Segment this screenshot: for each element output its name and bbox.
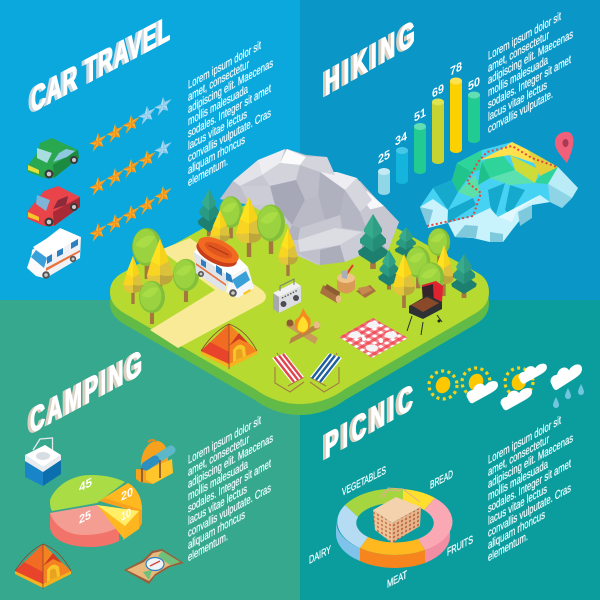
segment: dairy xyxy=(337,505,368,548)
firewood logs xyxy=(320,284,376,303)
star rating row 1 xyxy=(89,93,172,154)
icon: green car xyxy=(27,138,79,178)
icon: backpack xyxy=(136,440,173,484)
icon: map pin xyxy=(555,132,573,163)
dotted route xyxy=(427,146,557,226)
text block: hiking: lacus vitae lectus xyxy=(488,77,547,124)
slice: 20 xyxy=(99,483,142,529)
pie value 45: 45 xyxy=(79,474,92,495)
icon: camper van xyxy=(27,228,81,279)
icon: red car xyxy=(27,186,80,226)
panel: car travel background xyxy=(0,0,300,300)
island top xyxy=(110,179,489,404)
text block: picnic xyxy=(488,406,573,564)
island tent xyxy=(201,324,257,369)
icon: folded map with compass xyxy=(124,549,184,584)
text block: car travel: amet, consectetur xyxy=(188,56,249,104)
text block: camping: mollis malesuada xyxy=(188,456,249,503)
text block: car travel: aliquam rhoncus xyxy=(188,132,245,177)
icon: sun between clouds xyxy=(501,364,547,410)
icon: tent xyxy=(15,544,71,589)
trees left group xyxy=(123,228,199,324)
text block: picnic: lacus vitae lectus xyxy=(488,481,547,528)
boombox xyxy=(273,279,301,313)
pie value 25: 25 xyxy=(79,507,91,527)
text block: camping: lacus vitae lectus xyxy=(188,481,247,528)
text block: picnic: Lorem ipsum dolor sit xyxy=(488,412,561,467)
island side xyxy=(110,190,489,415)
ring side xyxy=(360,548,425,568)
panel: camping background xyxy=(0,300,300,600)
bar value 78: 78 xyxy=(450,58,462,79)
label: bread: BREAD xyxy=(430,468,453,492)
road xyxy=(150,238,266,348)
text block: picnic: amet, consectetur xyxy=(488,431,549,479)
text block: car travel: lacus vitae lectus xyxy=(188,106,247,153)
text block: hiking: convallis vulputate. xyxy=(488,86,553,136)
bar chart: cylinders xyxy=(378,58,480,195)
panel: hiking background xyxy=(300,0,600,300)
text block: hiking xyxy=(488,2,573,136)
pie value 20: 20 xyxy=(121,484,133,504)
pie value 10: 10 xyxy=(121,505,131,524)
text block: picnic: elementum. xyxy=(488,528,528,564)
bar 50 xyxy=(468,92,480,143)
segment: meat xyxy=(360,537,425,555)
label: meat: MEAT xyxy=(387,568,407,591)
panel: picnic background xyxy=(300,300,600,600)
bar 78 xyxy=(450,78,462,153)
text block: car travel: convallis vulputate. Cras xyxy=(188,105,271,165)
grill xyxy=(407,281,443,335)
text block: car travel xyxy=(188,31,273,189)
slice: 10 xyxy=(97,505,139,539)
bar value 25: 25 xyxy=(378,146,390,167)
bar 51 xyxy=(414,123,426,174)
text block: car travel: Lorem ipsum dolor sit xyxy=(188,37,261,92)
hiking section xyxy=(325,2,578,242)
terrain map xyxy=(420,142,578,242)
star rating row 2 xyxy=(89,136,172,198)
label: fruits: FRUITS xyxy=(447,533,473,559)
icon: rain cloud xyxy=(551,364,584,408)
text block: camping xyxy=(188,406,273,564)
mountain xyxy=(220,149,399,265)
bar value 69: 69 xyxy=(432,80,444,101)
central island scene xyxy=(110,149,489,415)
bar value 34: 34 xyxy=(395,128,408,149)
car travel section xyxy=(27,9,273,279)
text block: camping: sodales. Integer sit amet xyxy=(188,455,271,516)
segment: fruits xyxy=(418,498,452,550)
label: dairy: DAIRY xyxy=(309,543,331,567)
star rating row 3 xyxy=(89,182,172,244)
picnic blanket xyxy=(339,318,408,358)
text block: hiking: amet, consectetur xyxy=(488,27,549,75)
ring chart xyxy=(336,489,452,568)
bar 25 xyxy=(378,168,390,195)
text block: hiking: mollis malesuada xyxy=(488,52,549,99)
icon: sun behind cloud xyxy=(462,368,498,403)
text block: car travel: sodales. Integer sit amet xyxy=(188,80,271,141)
text block: car travel: adipiscing elit. Maecenas xyxy=(188,55,273,116)
picnic section xyxy=(309,364,584,591)
icon: picnic basket xyxy=(373,488,421,543)
text block: car travel: elementum. xyxy=(188,153,228,189)
camping section xyxy=(15,343,273,589)
text block: picnic: mollis malesuada xyxy=(488,456,549,503)
segment: bread xyxy=(403,489,435,510)
text block: camping: aliquam rhoncus xyxy=(188,507,245,552)
slice: 25 xyxy=(50,505,119,547)
trees back row xyxy=(198,189,477,308)
text block: camping: amet, consectetur xyxy=(188,431,249,479)
icon: sun xyxy=(429,371,457,399)
raft xyxy=(193,231,243,272)
bar 34 xyxy=(396,147,408,184)
segment: vegetables xyxy=(345,489,403,517)
title: car travel: CAR TRAVEL xyxy=(31,9,170,121)
title: picnic: PICNIC xyxy=(325,378,413,467)
text block: camping: adipiscing elit. Maecenas xyxy=(188,430,273,491)
text block: camping: convallis vulputate. Cras xyxy=(188,480,271,540)
text block: car travel: mollis malesuada xyxy=(188,81,249,128)
text block: camping: elementum. xyxy=(188,528,228,564)
blue deck chair xyxy=(310,353,342,392)
bar value 50: 50 xyxy=(468,73,480,94)
title: hiking: HIKING xyxy=(325,14,415,104)
camper van with raft xyxy=(193,231,254,298)
text block: picnic: aliquam rhoncus xyxy=(488,507,545,552)
icon: cooler xyxy=(25,438,61,486)
bar 69 xyxy=(432,98,444,164)
pie chart xyxy=(50,474,142,547)
label: vegetables: VEGETABLES xyxy=(342,464,386,499)
red deck chair xyxy=(272,353,304,392)
slice: 45 xyxy=(50,475,125,511)
text block: camping: Lorem ipsum dolor sit xyxy=(188,412,261,467)
axe and stump xyxy=(337,265,355,294)
bar value 51: 51 xyxy=(414,104,426,125)
campfire xyxy=(286,308,320,344)
title: camping: CAMPING xyxy=(30,343,142,442)
